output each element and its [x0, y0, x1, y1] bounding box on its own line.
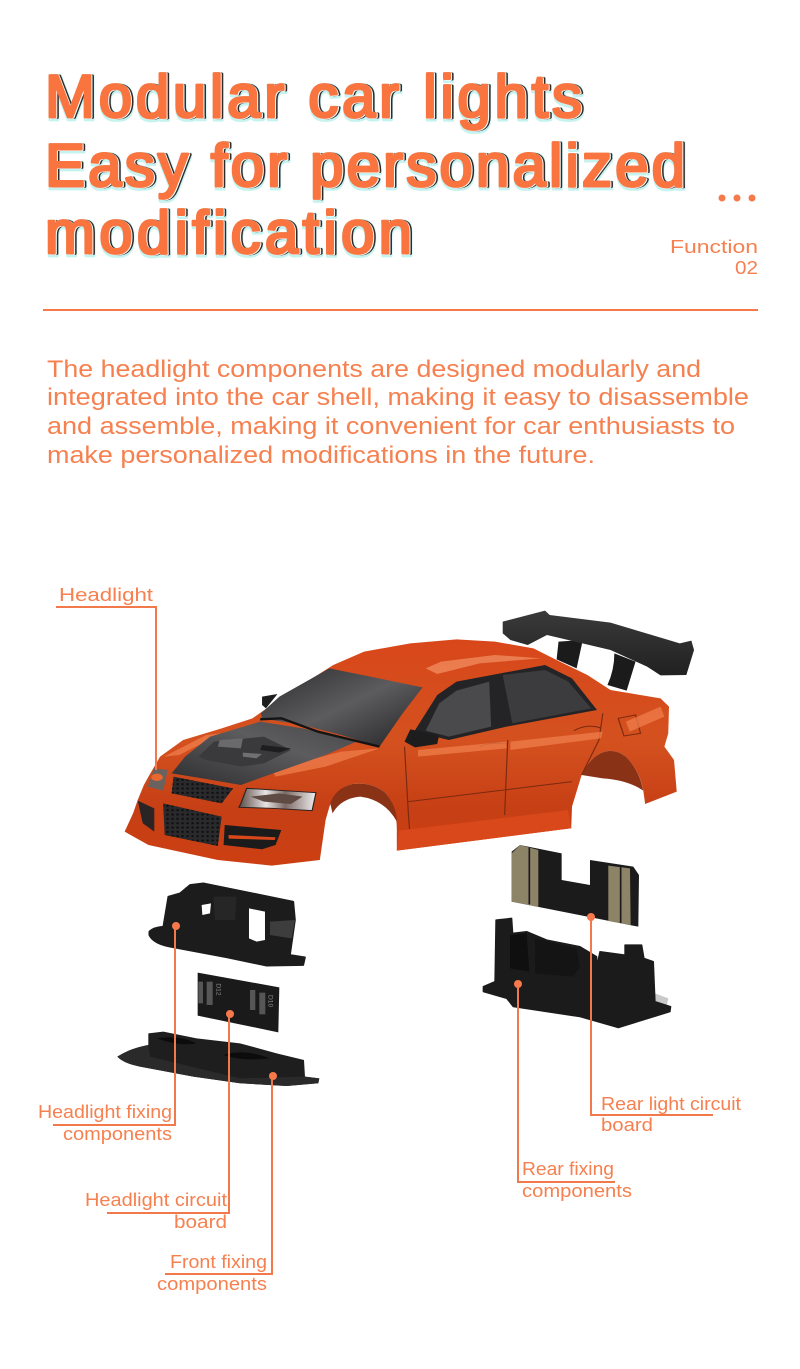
- hood: [172, 722, 356, 785]
- body text: The headlight components are designed modularly and: [47, 356, 701, 383]
- roof highlight: [426, 655, 541, 674]
- function number label: Function: [670, 237, 758, 257]
- callout: rear fixing components: components: [522, 1180, 632, 1201]
- rear wing: [503, 611, 694, 691]
- side mirrors: [262, 694, 439, 747]
- title: modification: [45, 199, 412, 266]
- callout: rear fixing components: Rear fixing: [522, 1158, 614, 1179]
- right headlight: [239, 788, 316, 811]
- callout: front fixing components: Front fixing: [170, 1251, 267, 1272]
- wheel arches: [330, 751, 643, 822]
- headlight circuit board part: [198, 973, 279, 1032]
- headlight circuit board part: D12: [215, 983, 222, 996]
- headlight circuit board part: D10: [266, 995, 273, 1007]
- title: Modular car lights: [45, 63, 582, 130]
- icon: three dots: [718, 194, 756, 202]
- body text: make personalized modifications in the future.: [47, 442, 595, 469]
- callout: headlight fixing components: [38, 922, 180, 1144]
- body text: integrated into the car shell, making it easy to disassemble: [47, 384, 749, 411]
- callout: rear fixing components: [514, 980, 632, 1201]
- callout: rear light circuit board: Rear light circuit: [601, 1093, 741, 1114]
- wiper: [260, 718, 380, 747]
- rear housing part: [483, 918, 671, 1028]
- left headlight: [148, 768, 168, 791]
- hood vents: [199, 737, 291, 767]
- callout: front fixing components: components: [157, 1273, 267, 1294]
- front housing part: [149, 883, 305, 966]
- title: Easy for personalized: [45, 132, 685, 199]
- front right vent: [224, 825, 281, 849]
- callout: rear light circuit board: board: [601, 1114, 653, 1135]
- front cover part: [117, 1032, 319, 1086]
- car body: [125, 639, 677, 866]
- windshield: [261, 668, 423, 747]
- callout: headlight circuit board: [85, 1010, 234, 1232]
- door lines and handles: [405, 713, 641, 830]
- title: [45, 63, 685, 266]
- callout: headlight: [56, 584, 156, 770]
- callout: headlight fixing components: components: [63, 1123, 172, 1144]
- callout: headlight circuit board: Headlight circuit: [85, 1189, 227, 1210]
- side skirt: [397, 810, 571, 851]
- body text: and assemble, making it convenient for car enthusiasts to: [47, 413, 735, 440]
- body text: [47, 356, 749, 469]
- function number label: 02: [735, 258, 758, 278]
- callout: headlight circuit board: board: [174, 1211, 227, 1232]
- callout: front fixing components: [157, 1072, 277, 1294]
- car shell illustration: [125, 611, 694, 866]
- callout: headlight: Headlight: [59, 584, 153, 605]
- front left vent: [138, 801, 154, 832]
- function number label: [670, 237, 758, 278]
- rear circuit board part: [512, 845, 639, 927]
- callout: rear light circuit board: [587, 913, 741, 1135]
- body highlights: [164, 707, 664, 777]
- lower grille: [163, 803, 222, 846]
- side window frames and glass: [414, 665, 597, 740]
- upper grille: [172, 777, 233, 803]
- callout: headlight fixing components: Headlight fixing: [38, 1101, 172, 1122]
